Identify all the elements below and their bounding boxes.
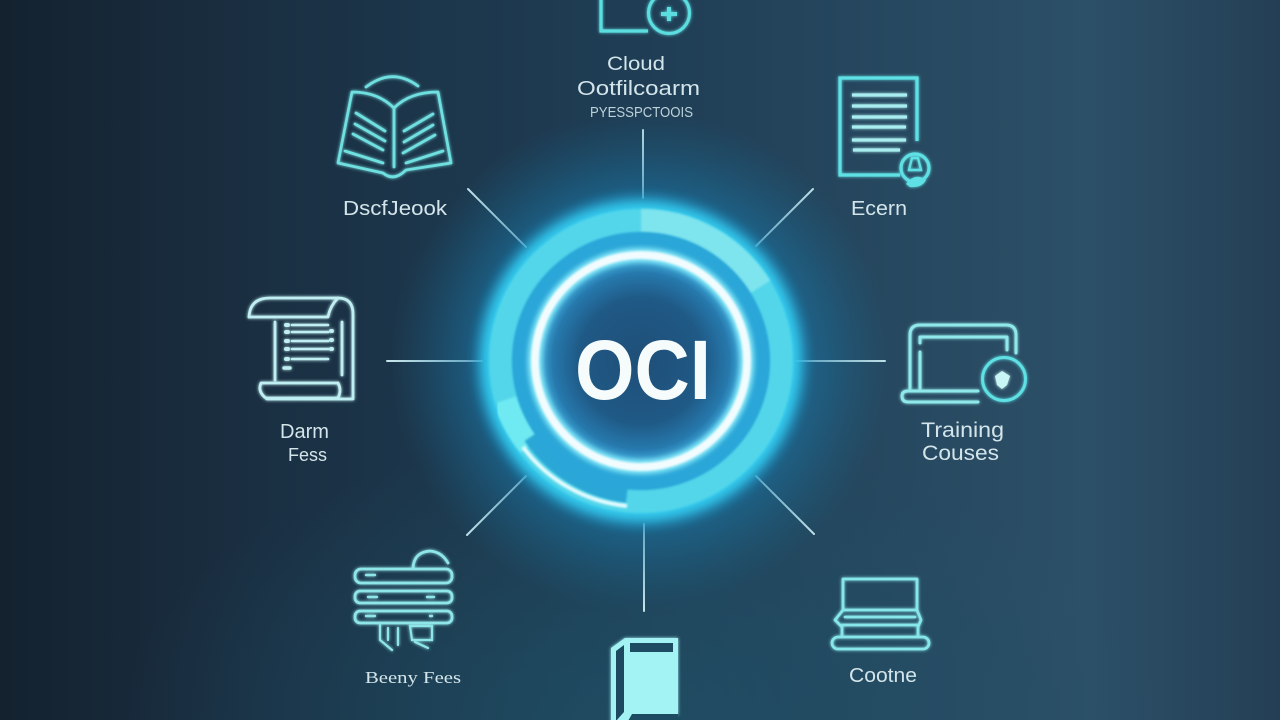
label: Darm bbox=[280, 421, 329, 443]
icon: laptop with badge bbox=[902, 325, 1026, 402]
icon: solid binder bbox=[611, 638, 678, 720]
connector lines bbox=[387, 130, 885, 611]
inner disk bbox=[537, 257, 745, 465]
white ring bbox=[535, 255, 747, 467]
label: DscfJeook bbox=[343, 198, 448, 220]
item: Cloud certification, top: Ootfilcoarm bbox=[577, 78, 700, 100]
icon: laptop stack bbox=[832, 579, 929, 649]
icon: server stack bbox=[355, 551, 452, 650]
item: exam, upper right bbox=[840, 78, 929, 220]
item: courses laptop, lower right bbox=[832, 579, 929, 687]
item: training courses, right: Couses bbox=[922, 442, 999, 465]
item: Cloud certification, top bbox=[577, 0, 700, 121]
item: fees servers, lower left bbox=[355, 551, 461, 687]
icon: laptop with plus badge bbox=[601, 0, 690, 34]
item: fees scroll, left: Fess bbox=[288, 445, 327, 465]
central OCI hub bbox=[391, 111, 891, 611]
label: Cootne bbox=[849, 665, 917, 687]
item: Cloud certification, top: PYESSPCTOOIS bbox=[590, 104, 693, 121]
label: Training bbox=[921, 419, 1004, 442]
label: Beeny Fees bbox=[365, 668, 461, 687]
item: training courses, right bbox=[902, 325, 1026, 465]
item: fees scroll, left bbox=[249, 298, 353, 465]
outer ring band bbox=[501, 221, 781, 501]
icon: document with badge bbox=[840, 78, 929, 187]
label: Ecern bbox=[851, 198, 907, 220]
item: book, upper left bbox=[338, 77, 451, 220]
icon: open book bbox=[338, 77, 451, 177]
icon: scroll document bbox=[249, 298, 353, 399]
item: bottom book icon bbox=[611, 638, 678, 720]
OCI title: OCI bbox=[575, 323, 711, 417]
label: Cloud bbox=[607, 54, 665, 75]
middle blue ring bbox=[523, 243, 759, 479]
